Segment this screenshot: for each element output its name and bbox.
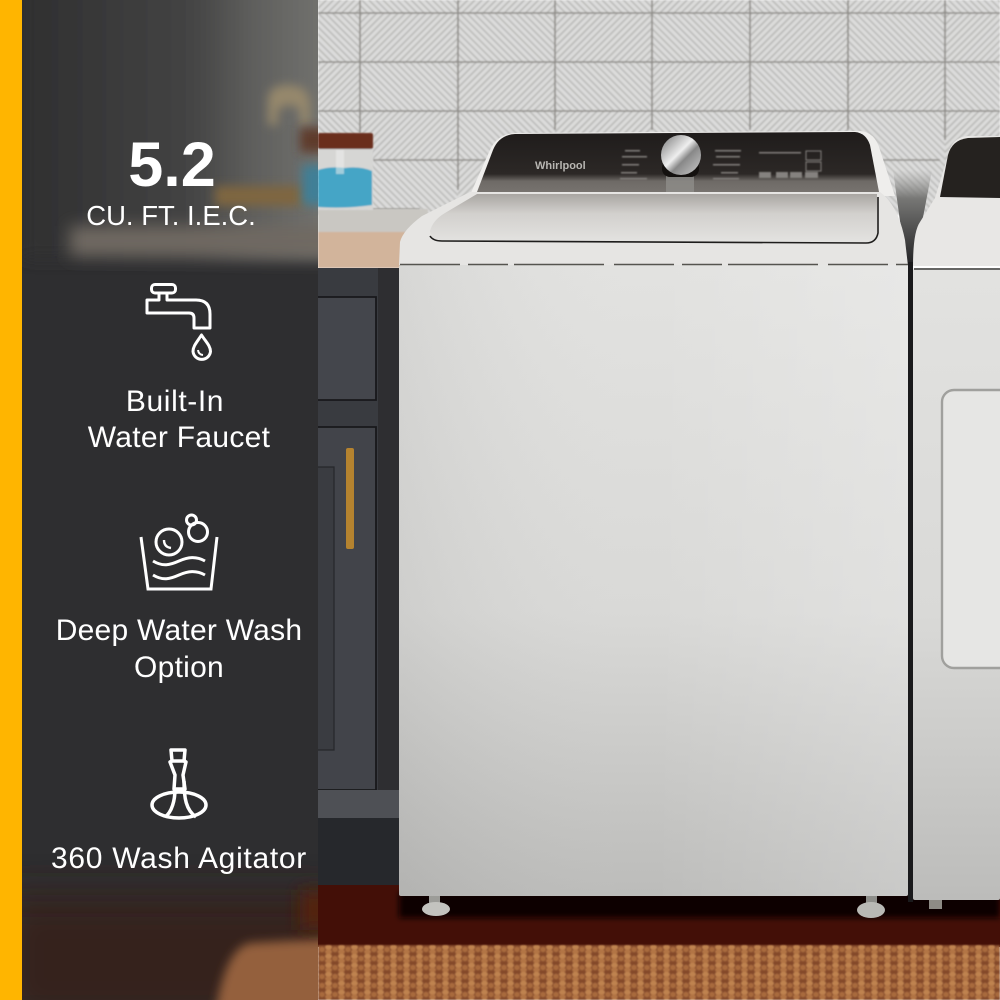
washer cabinet front: [399, 265, 908, 896]
panel: dark feature sidebar: [22, 0, 318, 1000]
neighbouring dryer: [908, 136, 1000, 902]
label: built-in water faucet: Built-In: [126, 385, 224, 418]
console labels: [620, 150, 821, 180]
icon: 360 wash agitator: [152, 750, 206, 818]
label: built-in water faucet: Water Faucet: [88, 421, 271, 454]
label: deep water wash option: Deep Water Wash: [56, 614, 302, 647]
icon: water faucet: [147, 284, 210, 359]
label: deep water wash option: Option: [134, 651, 224, 684]
label: 360 wash agitator: 360 Wash Agitator: [51, 842, 307, 875]
brand name: Whirlpool: [535, 160, 586, 172]
photo: laundry room scene: [318, 0, 1000, 1000]
tile backsplash: [318, 0, 1000, 215]
blurred photo colours behind the panel: [22, 81, 318, 1000]
washer feet: [422, 893, 942, 918]
shadow gap between appliances: [893, 170, 932, 265]
dial knob: [661, 135, 701, 202]
lid and top: [399, 192, 908, 266]
label: deep water wash option: [56, 614, 302, 684]
stat: capacity: 5.2: [128, 130, 216, 200]
floor: [318, 885, 1000, 947]
countertop: [318, 209, 428, 268]
label: built-in water faucet: [88, 385, 271, 454]
stat: capacity: [86, 130, 256, 231]
accent bar: [0, 0, 22, 1000]
stat: capacity: CU. FT. I.E.C.: [86, 200, 256, 231]
control console glass: [470, 131, 895, 196]
cabinet: [318, 268, 399, 886]
washer: [399, 131, 942, 918]
jar with blue granules: [318, 133, 373, 210]
icon: deep water wash tub: [141, 515, 217, 589]
jute rug: [318, 945, 1000, 1000]
